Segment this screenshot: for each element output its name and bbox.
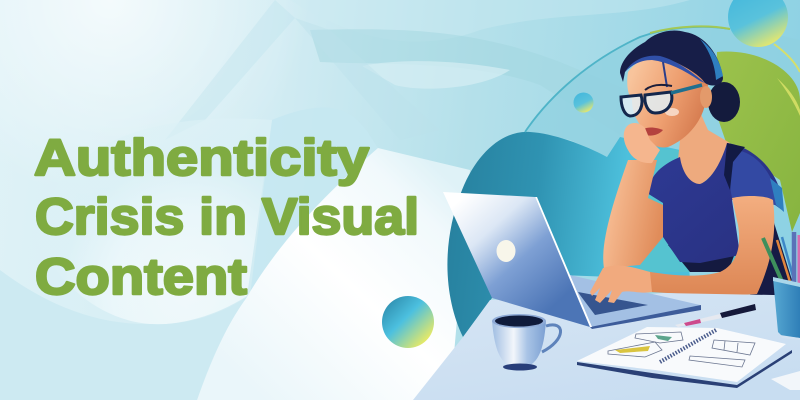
- circle: small: [574, 92, 594, 112]
- shirt strap shadow: [724, 143, 745, 190]
- shirt sleeve highlight: [730, 150, 782, 210]
- shirt: [647, 143, 780, 263]
- hair: [620, 30, 723, 85]
- teal blob: [447, 132, 690, 337]
- sky panel behind figure: [525, 27, 800, 200]
- open notebook: [577, 327, 792, 388]
- notebook spiral: [660, 330, 716, 362]
- laptop lid: [443, 192, 590, 327]
- lips: [643, 127, 663, 136]
- cheek highlight: [665, 108, 679, 116]
- laptop base: [560, 275, 700, 327]
- ear: [700, 86, 712, 108]
- title: Authenticity: [34, 129, 370, 186]
- hand on keyboard: [590, 265, 652, 303]
- glasses: [621, 92, 672, 116]
- hand at chin: [624, 123, 660, 163]
- arc: teal and green sweep: [525, 27, 730, 132]
- coffee mug: [492, 314, 561, 370]
- notebook sketches: [608, 332, 755, 367]
- dark under shirt: [668, 245, 738, 272]
- white circle: [36, 118, 272, 324]
- title: [34, 129, 419, 305]
- dark backdrop behind arm: [750, 210, 792, 296]
- pencil cup: [763, 232, 800, 340]
- laptop: [443, 192, 701, 329]
- neck: [678, 112, 730, 186]
- arc: yellow: [774, 44, 800, 72]
- arm: reaching to keyboard: [640, 196, 774, 295]
- circle: lower left: [382, 296, 434, 348]
- eyebrow: [645, 85, 672, 90]
- pen: [675, 304, 756, 327]
- keyboard: [578, 292, 648, 315]
- title: Crisis in Visual: [35, 188, 419, 245]
- woman figure: [603, 30, 792, 296]
- hair bun: [708, 82, 740, 122]
- glasses temple: [671, 85, 702, 93]
- paper note: [771, 371, 800, 390]
- laptop logo: [496, 240, 516, 262]
- title: Content: [35, 248, 247, 305]
- circle: top right: [728, 0, 788, 47]
- face: [627, 57, 708, 148]
- arm: propping chin: [603, 160, 663, 268]
- green leaf: [715, 52, 800, 232]
- desk: [413, 293, 800, 400]
